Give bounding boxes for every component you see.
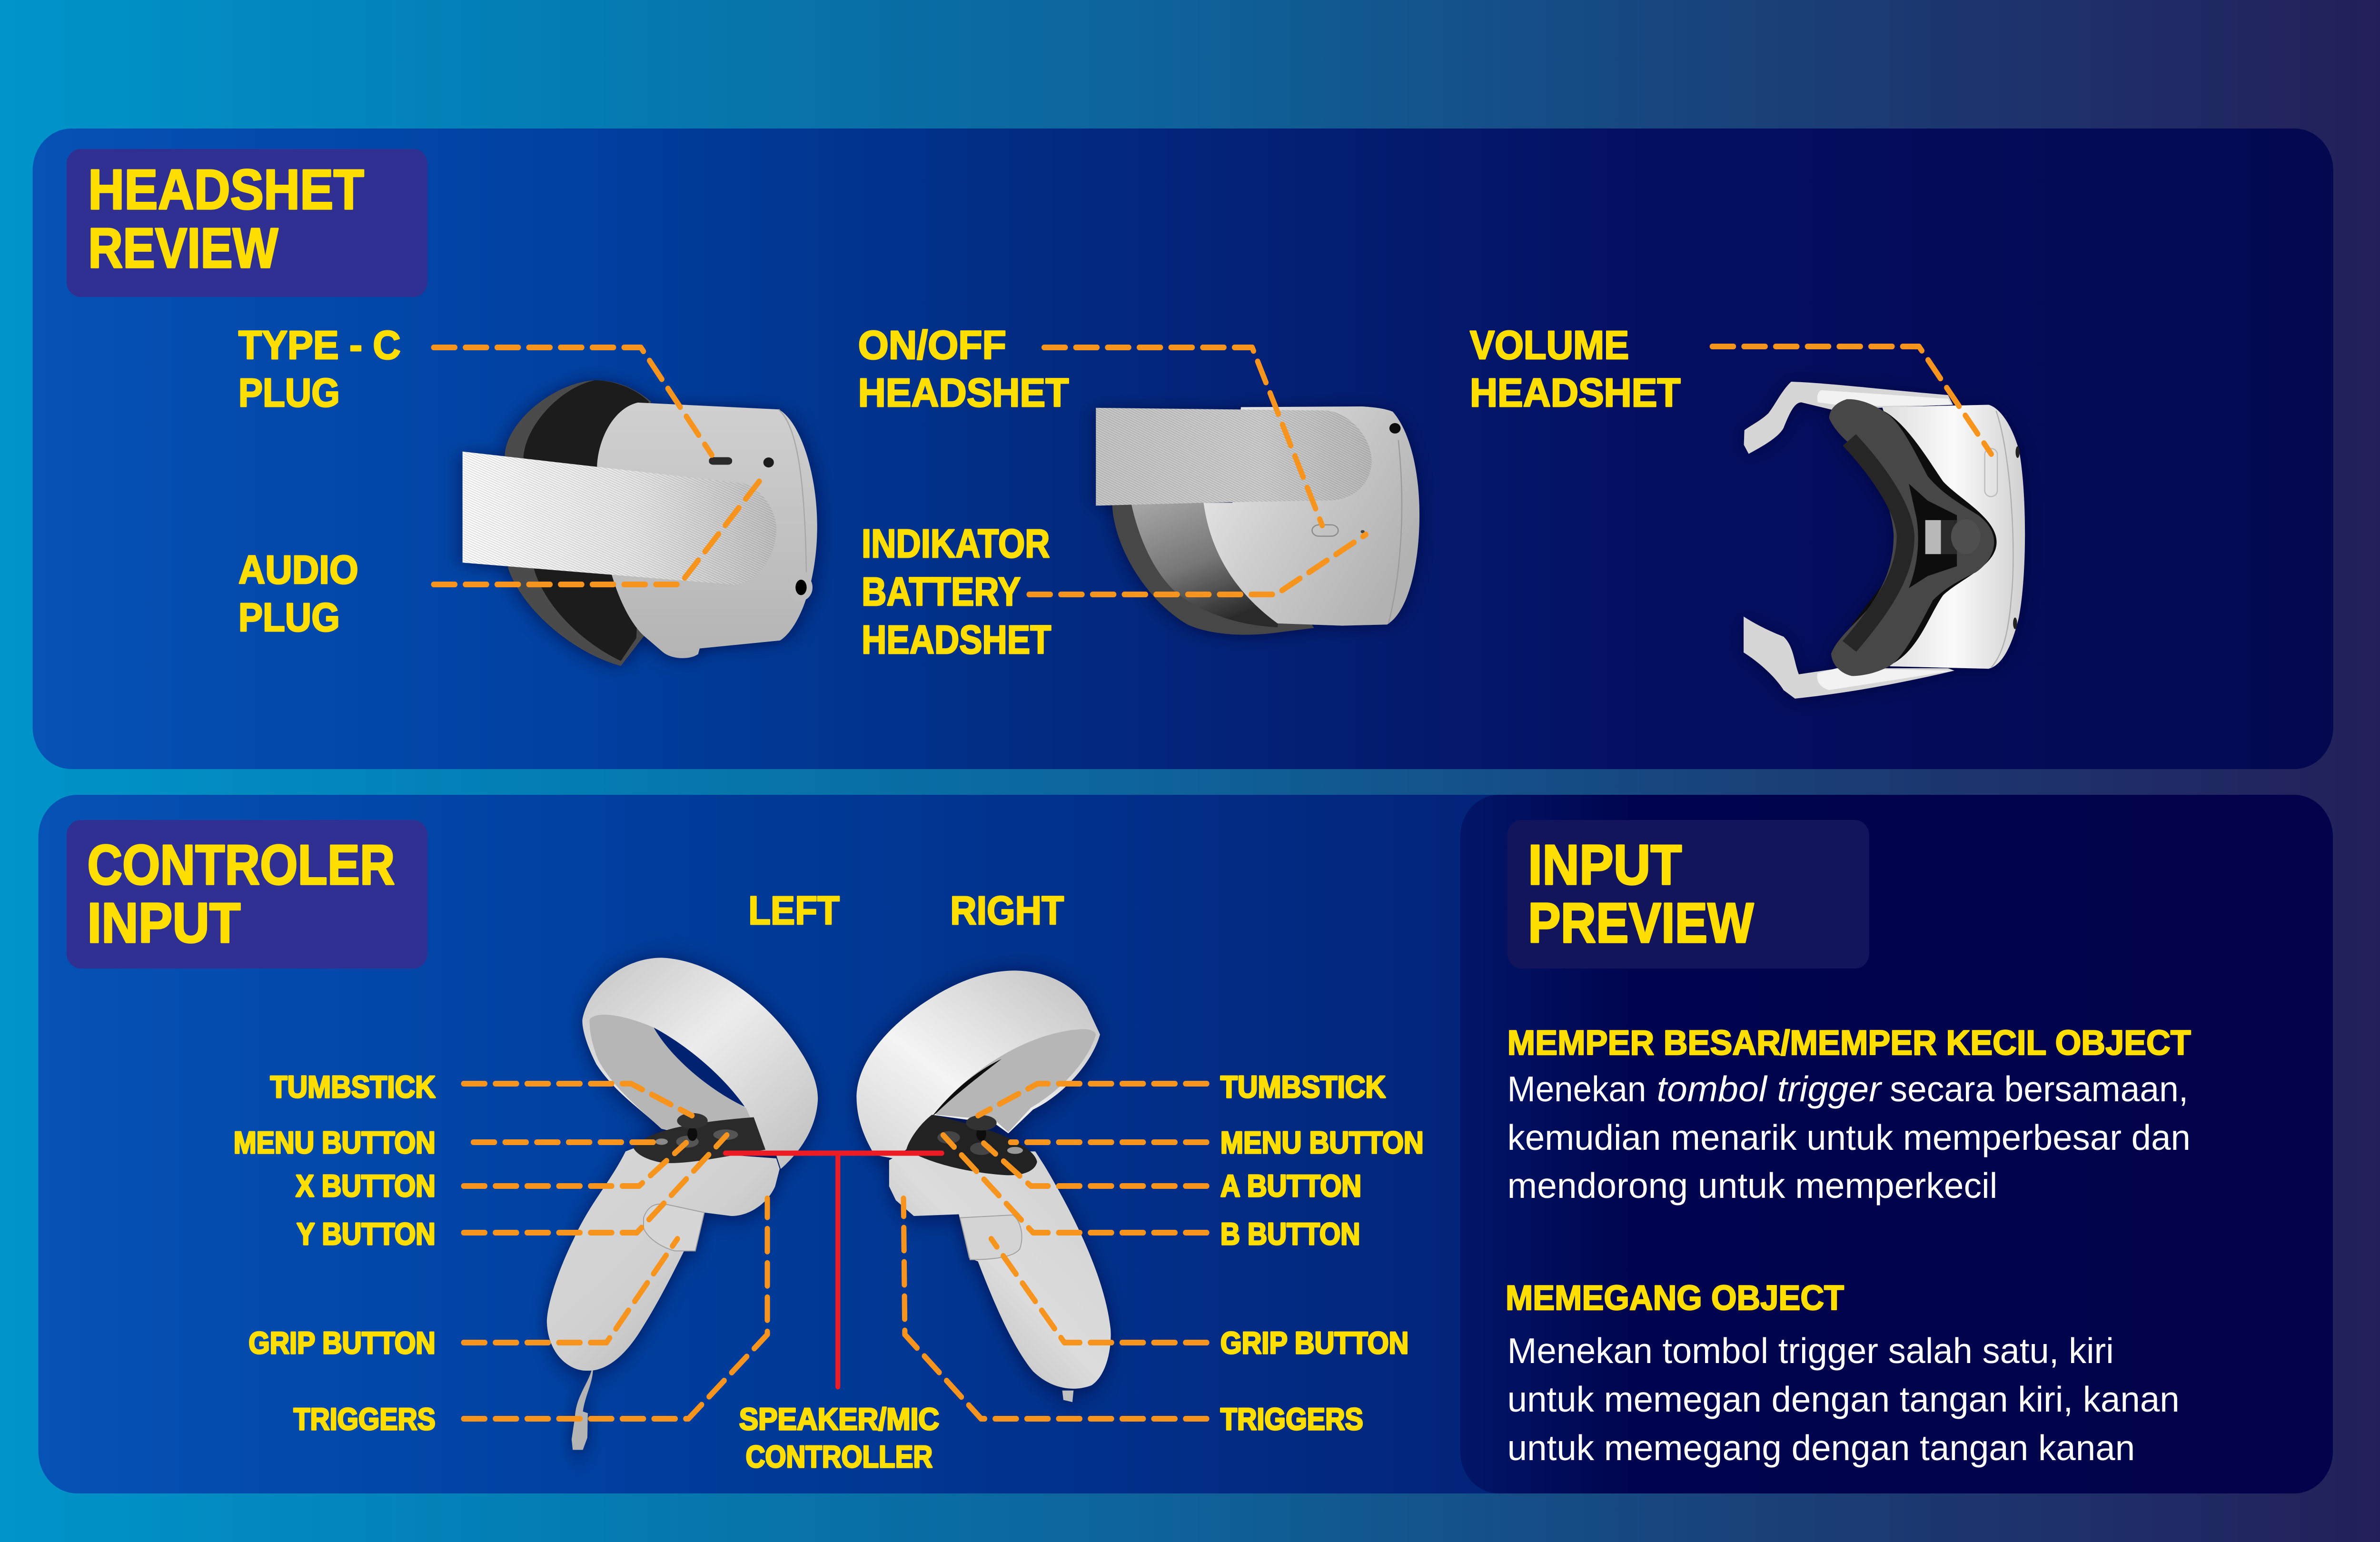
label: type-c plug: TYPE - C: [238, 323, 401, 368]
headset photo: side view with strap: [463, 380, 817, 666]
panel: input preview: [1460, 795, 2333, 1493]
label: menu button right: MENU BUTTON: [1220, 1126, 1424, 1160]
label: audio plug: AUDIO: [238, 548, 358, 593]
label: on/off headshet: HEADSHET: [858, 371, 1069, 415]
text block: zoom instructions: Menekan: [1507, 1070, 1646, 1109]
label: left: LEFT: [748, 889, 840, 933]
leader line: volume: [1712, 346, 1991, 454]
heading: input preview: PREVIEW: [1528, 891, 1754, 955]
label: y button: Y BUTTON: [297, 1217, 436, 1252]
headset photo: side view with power button: [1096, 406, 1419, 635]
speaker/mic pointer: [725, 1153, 942, 1387]
label: b button: B BUTTON: [1220, 1217, 1360, 1252]
label: type-c plug: [238, 323, 401, 415]
panel: headset review: [33, 128, 2333, 769]
text block: zoom instructions: mendorong untuk memperkecil: [1507, 1166, 1997, 1206]
label: x button: X BUTTON: [296, 1169, 436, 1204]
text block: holding instructions: untuk memegang dengan tangan kanan: [1507, 1429, 2135, 1468]
label: a button: A BUTTON: [1220, 1169, 1361, 1204]
label: speaker/mic controller: SPEAKER/MIC: [739, 1402, 939, 1437]
text block: zoom instructions: [1507, 1070, 2191, 1206]
label: speaker/mic controller: CONTROLLER: [746, 1440, 932, 1474]
headset photo: inner view with face foam: [1744, 382, 2025, 699]
heading: headshet review: REVIEW: [88, 217, 278, 280]
heading: controler input: INPUT: [87, 891, 241, 955]
controller photo: left: [547, 958, 818, 1450]
label: right: RIGHT: [950, 889, 1064, 933]
heading: controler input: CONTROLER: [87, 833, 395, 897]
label: audio plug: PLUG: [238, 595, 340, 640]
label: volume headshet: HEADSHET: [1470, 371, 1681, 415]
label: grip button left: GRIP BUTTON: [248, 1326, 436, 1361]
text block: zoom instructions: secara bersamaan,: [1890, 1070, 2188, 1109]
label: triggers left: TRIGGERS: [294, 1402, 436, 1437]
text block: holding instructions: Menekan tombol trigger salah satu, kiri: [1507, 1332, 2114, 1371]
label: tumbstick right: TUMBSTICK: [1220, 1070, 1386, 1105]
label: audio plug: [238, 548, 358, 640]
heading: headshet review: HEADSHET: [88, 158, 364, 221]
subheading: memper besar/memper kecil object: MEMPER BESAR/MEMPER KECIL OBJECT: [1507, 1023, 2191, 1062]
label: volume headshet: [1470, 323, 1681, 415]
label: triggers right: TRIGGERS: [1220, 1402, 1363, 1437]
label: indikator battery headshet: HEADSHET: [862, 618, 1051, 662]
label: volume headshet: VOLUME: [1470, 323, 1629, 368]
text block: zoom instructions: tombol trigger: [1657, 1070, 1883, 1109]
label: on/off headshet: [858, 323, 1069, 415]
label: tumbstick left: TUMBSTICK: [270, 1070, 436, 1105]
label: type-c plug: PLUG: [238, 371, 340, 415]
label: indikator battery headshet: [862, 522, 1051, 662]
leader lines: left controller: [464, 1084, 767, 1419]
label: indikator battery headshet: INDIKATOR: [862, 522, 1050, 566]
leader line: battery indicator: [1029, 534, 1366, 594]
label: speaker/mic controller: [739, 1402, 939, 1474]
label: menu button left: MENU BUTTON: [234, 1126, 436, 1160]
leader lines: right controller: [903, 1084, 1207, 1419]
text block: zoom instructions: kemudian menarik untuk memperbesar dan: [1507, 1118, 2191, 1158]
heading: input preview: [1507, 820, 1869, 969]
text block: holding instructions: [1507, 1332, 2180, 1468]
leader line: type-c plug: [434, 347, 712, 455]
heading: input preview: INPUT: [1528, 833, 1682, 897]
subheading: memegang object: MEMEGANG OBJECT: [1506, 1278, 1844, 1317]
heading: headshet review: [67, 149, 427, 297]
label: indikator battery headshet: BATTERY: [862, 570, 1021, 614]
heading: controler input: [67, 820, 427, 969]
leader line: audio plug: [434, 478, 762, 584]
label: on/off headshet: ON/OFF: [858, 323, 1006, 368]
controller photo: right: [856, 970, 1111, 1402]
panel: controler input: [39, 795, 2333, 1493]
text block: holding instructions: untuk memegan dengan tangan kiri, kanan: [1507, 1380, 2180, 1420]
leader line: on/off button: [1044, 347, 1322, 525]
label: grip button right: GRIP BUTTON: [1220, 1326, 1408, 1361]
